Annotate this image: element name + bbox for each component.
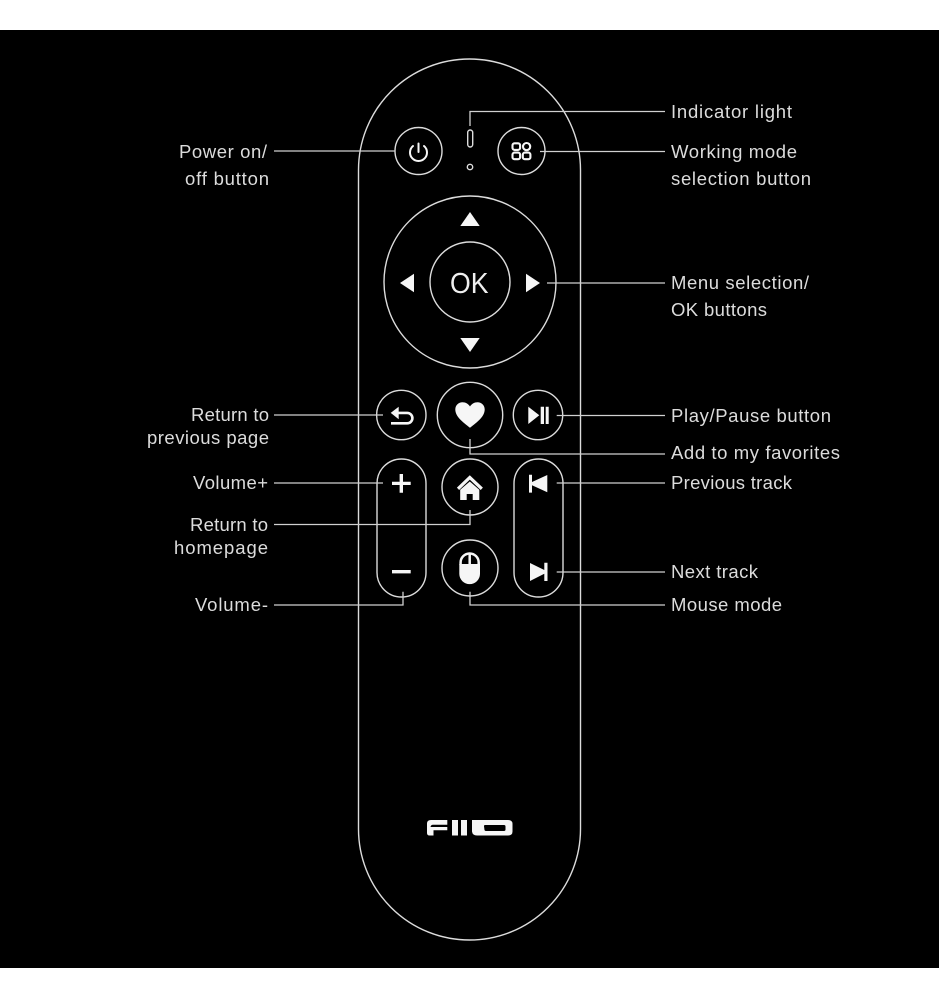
icon: mouse xyxy=(459,553,480,584)
label: power on/off button: Power on/ xyxy=(179,141,268,162)
label: previous track: Previous track xyxy=(671,472,793,493)
arrow: right xyxy=(526,274,540,292)
label: menu selection / OK buttons xyxy=(671,272,810,320)
label: power on/off button: off button xyxy=(185,168,269,189)
label: working mode selection button xyxy=(671,141,811,189)
remote control body outline xyxy=(358,59,580,940)
icon: back arrow xyxy=(391,407,412,423)
label: return to previous page: previous page xyxy=(147,427,269,448)
label: add to my favorites: Add to my favorites xyxy=(671,442,840,463)
home button xyxy=(442,459,498,515)
label: menu selection / OK buttons: Menu selection/ xyxy=(671,272,810,293)
power button xyxy=(395,128,442,174)
label: return to previous page xyxy=(147,404,269,448)
mouse mode button xyxy=(442,540,498,596)
icon: power xyxy=(410,144,427,161)
play/pause button xyxy=(513,390,563,440)
icon: previous track xyxy=(529,475,547,493)
icon: house xyxy=(458,478,482,500)
leader line: menu selection xyxy=(547,282,665,284)
leader line: mouse mode xyxy=(470,592,665,605)
label: play/pause button: Play/Pause button xyxy=(671,405,831,426)
track skip rocker xyxy=(514,459,563,597)
OK label: OK xyxy=(450,268,489,300)
label: working mode selection button: selection button xyxy=(671,168,811,189)
label: return to homepage: Return to xyxy=(190,514,268,535)
indicator light xyxy=(467,130,473,170)
arrow: left xyxy=(400,274,414,292)
label: return to previous page: Return to xyxy=(191,404,269,425)
leader line: volume plus xyxy=(274,482,383,484)
icon: heart xyxy=(455,402,485,428)
return button xyxy=(377,390,426,440)
icon: play pause xyxy=(528,407,549,424)
label: menu selection / OK buttons: OK buttons xyxy=(671,299,767,320)
arrow: down xyxy=(460,338,480,352)
volume rocker xyxy=(377,459,426,597)
leader line: working mode xyxy=(540,150,665,152)
icon: plus xyxy=(392,474,411,493)
leader line: return xyxy=(274,414,383,416)
leader line: favorites xyxy=(470,439,665,454)
label: volume minus: Volume- xyxy=(195,594,268,615)
leader line: previous track xyxy=(557,482,665,484)
label: power on/off button xyxy=(179,141,269,189)
working mode button xyxy=(498,128,545,174)
leader line: indicator light xyxy=(470,112,665,126)
label: mouse mode: Mouse mode xyxy=(671,594,782,615)
leader line: homepage xyxy=(274,510,470,524)
leader line: next track xyxy=(557,571,665,573)
label: working mode selection button: Working mode xyxy=(671,141,797,162)
leader line: power xyxy=(274,150,395,152)
leader line: play pause xyxy=(557,414,665,416)
label: indicator light: Indicator light xyxy=(671,101,792,122)
directional pad xyxy=(384,196,556,368)
logo: FiiO xyxy=(427,820,512,836)
icon: four squares xyxy=(512,143,530,159)
leader line: volume minus xyxy=(274,592,403,605)
favorites button xyxy=(437,382,503,448)
label: return to homepage xyxy=(174,514,268,558)
label: volume plus: Volume+ xyxy=(193,472,268,493)
icon: next track xyxy=(530,563,548,581)
arrow: up xyxy=(460,212,480,226)
label: next track: Next track xyxy=(671,561,759,582)
icon: minus xyxy=(392,570,411,573)
label: return to homepage: homepage xyxy=(174,537,268,558)
